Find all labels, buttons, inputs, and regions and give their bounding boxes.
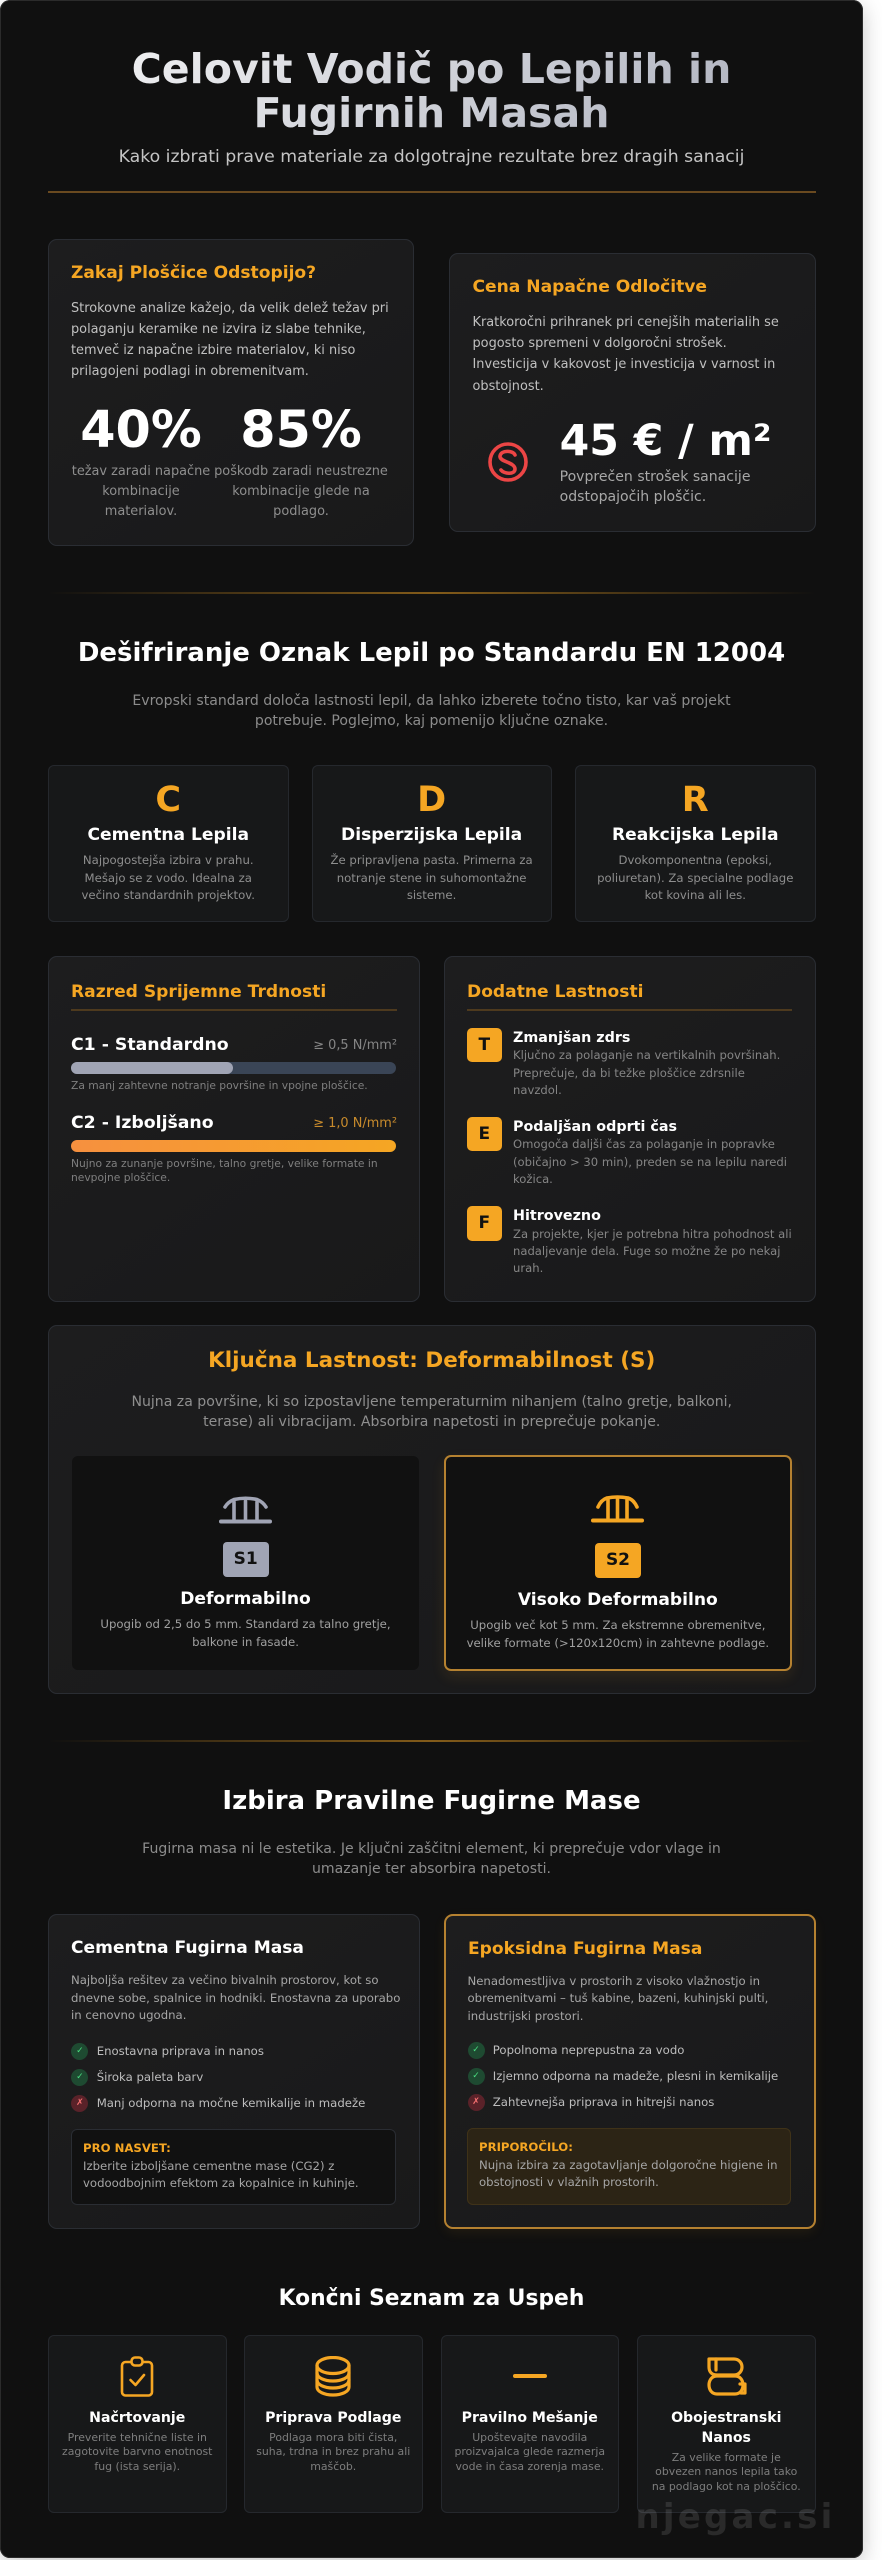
watermark: njegac.si — [636, 2497, 835, 2537]
property E text: kožica. — [513, 1172, 553, 1186]
card title: Nanos — [702, 2430, 751, 2446]
panel: deformability — [48, 1325, 816, 1694]
callout: recommendation — [467, 2128, 791, 2204]
card description — [256, 2431, 410, 2473]
stat: 85 percent: poškodb zaradi neustrezne — [214, 464, 388, 478]
pro: easy application: Enostavna priprava in nanos — [97, 2044, 264, 2058]
pro: stain resistant: Izjemno odporna na madeže, plesni in kemikalije — [493, 2068, 778, 2082]
card description — [62, 2431, 212, 2473]
text block: epoxy grout: industrijski prostori. — [468, 2009, 583, 2023]
card description: fug (ista serija). — [94, 2460, 180, 2473]
text block: cement grout: in cenovno ugodna. — [71, 2008, 186, 2022]
property F text: urah. — [513, 1261, 543, 1275]
badge F: F — [478, 1213, 490, 1233]
pro: colour range: ✓ — [76, 2072, 84, 2082]
property E text: (običajno > 30 min), preden se na lepilu naredi — [513, 1155, 787, 1169]
text block: epoxy grout — [468, 1974, 768, 2023]
heading: cost: Cena Napačne Odločitve — [472, 277, 707, 297]
caption: repair cost: odstopajočih ploščic. — [560, 489, 706, 505]
callout label: PRO NASVET: — [83, 2141, 171, 2155]
row: C1 standard: Za manj zahtevne notranje površine in vpojne ploščice. — [71, 1079, 368, 1092]
title: Fugirnih Masah — [253, 89, 610, 137]
stat: 85 percent: 85% — [240, 400, 362, 459]
text block: cost: Kratkoročni prihranek pri cenejših materialih se — [472, 315, 779, 330]
panel: epoxy grout — [444, 1914, 816, 2229]
con: chemicals: Manj odporna na močne kemikalije in madeže — [97, 2096, 365, 2110]
row: C2 improved — [71, 1113, 397, 1184]
callout text: Izberite izboljšane cementne mase (CG2) z — [83, 2159, 334, 2173]
badge S2: S2 — [606, 1550, 630, 1570]
card: R reactive adhesives — [575, 765, 816, 922]
row: C1 standard: C1 - Standardno — [71, 1035, 229, 1055]
section heading: EN 12004: Dešifriranje Oznak Lepil po Standardu EN 12004 — [78, 638, 785, 668]
property F — [467, 1206, 792, 1275]
S1 description: balkone in fasade. — [192, 1635, 299, 1649]
card description: maščob. — [310, 2460, 356, 2473]
con: demanding application: ✗ — [472, 2096, 480, 2106]
pro: stain resistant: ✓ — [472, 2070, 480, 2080]
badge S1 — [223, 1542, 269, 1577]
card description: na podlago kot na ploščico. — [652, 2480, 801, 2493]
property F text: Za projekte, kjer je potrebna hitra pohodnost ali — [513, 1227, 792, 1241]
badge S1: S1 — [234, 1549, 258, 1569]
card: planning — [48, 2335, 226, 2513]
card description: Dvokomponentna (epoksi, — [618, 853, 772, 867]
card: substrate preparation — [244, 2335, 422, 2513]
icon: layered database — [315, 2356, 351, 2397]
letter D: D — [417, 780, 446, 820]
property F text: nadaljevanje dela. Fuge so možne že po nekaj — [513, 1244, 780, 1258]
property F text: Hitrovezno — [513, 1208, 601, 1224]
callout: pro tip — [71, 2129, 396, 2205]
property E text — [513, 1119, 787, 1186]
caption: repair cost: Povprečen strošek sanacije — [560, 469, 750, 485]
card description: Za velike formate je — [672, 2451, 781, 2464]
card description — [82, 853, 255, 902]
section heading: grout: Izbira Pravilne Fugirne Mase — [222, 1786, 641, 1816]
heading: epoxy grout: Epoksidna Fugirna Masa — [468, 1939, 702, 1959]
property T text: Preprečuje, da bi težke ploščice zdrsnile — [513, 1066, 745, 1080]
icon: S2 bridge — [591, 1495, 644, 1522]
card title: Cementna Lepila — [87, 825, 249, 845]
heading: why tiles fail: Zakaj Ploščice Odstopijo? — [71, 263, 316, 283]
icon: dash — [513, 2374, 547, 2378]
text block: cement grout — [71, 1973, 400, 2022]
card title: Načrtovanje — [89, 2410, 185, 2426]
card description: Preverite tehnične liste in — [68, 2431, 207, 2444]
letter R: R — [682, 780, 709, 820]
panel: cement grout — [48, 1914, 420, 2229]
section intro: grout — [142, 1841, 721, 1877]
pro: waterproof: Popolnoma neprepustna za vodo — [493, 2042, 684, 2056]
card description: Podlaga mora biti čista, — [269, 2431, 397, 2444]
stat: 85 percent: podlago. — [273, 504, 329, 518]
card description: sisteme. — [407, 888, 456, 902]
card description — [331, 853, 533, 902]
text block: deformability — [131, 1394, 732, 1430]
property E — [467, 1117, 787, 1186]
icon: double spread — [702, 2356, 750, 2397]
icon: clipboard — [120, 2356, 154, 2397]
badge E — [467, 1117, 502, 1151]
badge E: E — [478, 1124, 490, 1144]
card description: proizvajalca glede razmerja — [454, 2445, 605, 2458]
row: C2 improved: ≥ 1,0 N/mm² — [313, 1116, 397, 1131]
text block: epoxy grout: obremenitvami – tuš kabine, bazeni, kuhinjski pulti, — [468, 1991, 768, 2005]
con: chemicals: ✗ — [76, 2098, 84, 2108]
S2 description: Upogib več kot 5 mm. Za ekstremne obremenitve, — [470, 1618, 765, 1632]
card title: Disperzijska Lepila — [341, 825, 522, 845]
card title: Reakcijska Lepila — [612, 825, 778, 845]
stat: 40 percent: težav zaradi napačne — [72, 464, 210, 478]
row: C2 improved: Nujno za zunanje površine, talno gretje, velike formate in — [71, 1157, 378, 1170]
section intro: EN 12004: potrebuje. Poglejmo, kaj pomenijo ključne oznake. — [255, 713, 608, 729]
badge T — [467, 1028, 502, 1062]
pro: easy application: ✓ — [76, 2046, 84, 2056]
badge F — [467, 1206, 502, 1241]
text block: cement grout: Najboljša rešitev za večino bivalnih prostorov, kot so — [71, 1973, 379, 1987]
S2 description — [467, 1618, 769, 1650]
caption: repair cost — [560, 469, 750, 505]
con: demanding application: Zahtevnejša priprava in hitrejši nanos — [493, 2094, 714, 2108]
text block: why tiles fail: temveč iz napačne izbire materialov, ki niso — [71, 343, 355, 358]
section intro: EN 12004 — [132, 693, 731, 729]
pro: waterproof: ✓ — [472, 2044, 480, 2054]
card description: suha, trdna in brez prahu ali — [256, 2445, 410, 2458]
text block: epoxy grout: Nenadomestljiva v prostorih z visoko vlažnostjo in — [468, 1974, 760, 1988]
card description: Že pripravljena pasta. Primerna za — [331, 853, 533, 867]
row: C2 improved: C2 - Izboljšano — [71, 1113, 214, 1133]
heading: deformability: Ključna Lastnost: Deformabilnost (S) — [208, 1348, 655, 1373]
property T — [467, 1028, 780, 1097]
box: S1 — [72, 1456, 419, 1670]
card: correct mixing — [440, 2335, 619, 2513]
text block: deformability: terase) ali vibracijam. Absorbira napetosti in preprečuje pokanje. — [203, 1414, 660, 1430]
stat: 40 percent: kombinacije — [102, 484, 180, 498]
text block: cement grout: dnevne sobe, spalnice in hodniki. Enostavna za uporabo — [71, 1991, 400, 2005]
card description: Mešajo se z vodo. Idealna za — [85, 871, 252, 885]
S1 description — [100, 1617, 391, 1649]
row: C1 standard — [71, 1035, 397, 1092]
section intro: grout: Fugirna masa ni le estetika. Je ključni zaščitni element, ki preprečuje vdor vlage in — [142, 1841, 721, 1857]
card description: obvezen nanos lepila tako — [655, 2465, 797, 2478]
card description: zagotovite barvno enotnost — [62, 2445, 212, 2458]
text block: why tiles fail: Strokovne analize kažejo, da velik delež težav pri — [71, 300, 389, 316]
section intro: EN 12004: Evropski standard določa lastnosti lepil, da lahko izberete točno tisto, kar vaš projekt — [132, 693, 731, 709]
heading: cement grout: Cementna Fugirna Masa — [71, 1938, 304, 1958]
text block: why tiles fail — [71, 300, 389, 379]
pro: colour range: Široka paleta barv — [97, 2070, 203, 2084]
stat: 40 percent: 40% — [80, 400, 202, 459]
property T text: navzdol. — [513, 1083, 562, 1097]
icon: red currency circle — [488, 442, 528, 482]
text block: why tiles fail: prilagojeni podlagi in obremenitvam. — [71, 364, 309, 379]
card description: kot kovina ali les. — [645, 888, 746, 902]
card title: Pravilno Mešanje — [462, 2410, 598, 2426]
callout text — [83, 2159, 359, 2190]
pro: colour range — [71, 2069, 203, 2086]
badge S2 — [595, 1543, 641, 1578]
card description: Upoštevajte navodila — [472, 2431, 587, 2444]
card description — [597, 853, 793, 902]
callout text: Nujna izbira za zagotavljanje dolgoročne higiene in — [479, 2158, 777, 2172]
card description — [454, 2431, 605, 2473]
text block: cost: obstojnost. — [472, 379, 544, 394]
panel: bond strength class — [48, 956, 420, 1302]
S2 title: Visoko Deformabilno — [518, 1590, 718, 1610]
text block: cost: Investicija v kakovost je investicija v varnost in — [472, 357, 775, 372]
S1 title: Deformabilno — [180, 1589, 311, 1609]
icon: S1 bridge — [219, 1496, 272, 1524]
callout text: vodoodbojnim efektom za kopalnice in kuhinje. — [83, 2176, 359, 2190]
heading: additional properties: Dodatne Lastnosti — [467, 982, 643, 1002]
property T text: Zmanjšan zdrs — [513, 1030, 630, 1046]
card description: večino standardnih projektov. — [82, 888, 255, 902]
callout label: PRIPOROČILO: — [479, 2140, 573, 2154]
card title — [637, 2408, 816, 2448]
badge T: T — [478, 1035, 490, 1055]
section heading: checklist: Končni Seznam za Uspeh — [279, 2286, 584, 2310]
panel: cost of wrong decision — [449, 253, 816, 532]
panel: additional properties — [444, 956, 816, 1302]
card description: poliuretan). Za specialne podlage — [597, 871, 793, 885]
callout text: obstojnosti v vlažnih prostorih. — [479, 2175, 659, 2189]
property E text: Podaljšan odprti čas — [513, 1119, 677, 1135]
property T text — [513, 1030, 780, 1097]
S1 description: Upogib od 2,5 do 5 mm. Standard za talno gretje, — [100, 1617, 391, 1631]
card description: notranje stene in suhomontažne — [337, 871, 526, 885]
property F text — [513, 1208, 792, 1275]
row: C2 improved: nevpojne ploščice. — [71, 1171, 170, 1184]
heading: bond strength: Razred Sprijemne Trdnosti — [71, 982, 326, 1002]
card title: Priprava Podlage — [265, 2410, 401, 2426]
title — [0, 47, 863, 135]
stat: 85 percent: kombinacije glede na — [232, 484, 370, 498]
card: double-sided application — [637, 2335, 816, 2513]
card: D dispersion adhesives — [312, 765, 552, 922]
S2 description: velike formate (>120x120cm) in zahtevne podlage. — [467, 1636, 769, 1650]
stat: 40 percent: materialov. — [105, 504, 177, 518]
text block: cost: pogosto spremeni v dolgoročni strošek. — [472, 336, 727, 351]
section intro: grout: umazanje ter absorbira napetosti. — [312, 1861, 551, 1877]
card description: vode in časa zorenja mase. — [455, 2460, 604, 2473]
text block: deformability: Nujna za površine, ki so izpostavljene temperaturnim nihanjem (talno gretje, balkoni, — [131, 1394, 732, 1410]
card title: Obojestranski — [671, 2410, 781, 2426]
stat: 85 percent — [214, 400, 388, 518]
property T text: Ključno za polaganje na vertikalnih površinah. — [513, 1048, 780, 1062]
stat: 45 euro per m2: 45 € / m² — [560, 416, 772, 466]
subtitle: Kako izbrati prave materiale za dolgotrajne rezultate brez dragih sanacij — [119, 147, 744, 167]
text block: cost — [472, 315, 779, 394]
card description — [637, 2451, 816, 2494]
panel: why tiles fail — [48, 239, 414, 546]
card description: Najpogostejša izbira v prahu. — [83, 853, 254, 867]
stat: 40 percent — [72, 400, 210, 518]
card: C cement adhesives — [48, 765, 288, 922]
title: Celovit Vodič po Lepilih in — [132, 45, 731, 93]
box: S2 highlighted — [444, 1455, 792, 1671]
property E text: Omogoča daljši čas za polaganje in popravke — [513, 1137, 775, 1151]
letter C: C — [155, 780, 181, 820]
text block: why tiles fail: polaganju keramike ne izvira iz slabe tehnike, — [71, 322, 366, 337]
callout text — [479, 2158, 777, 2189]
row: C1 standard: ≥ 0,5 N/mm² — [313, 1038, 397, 1053]
